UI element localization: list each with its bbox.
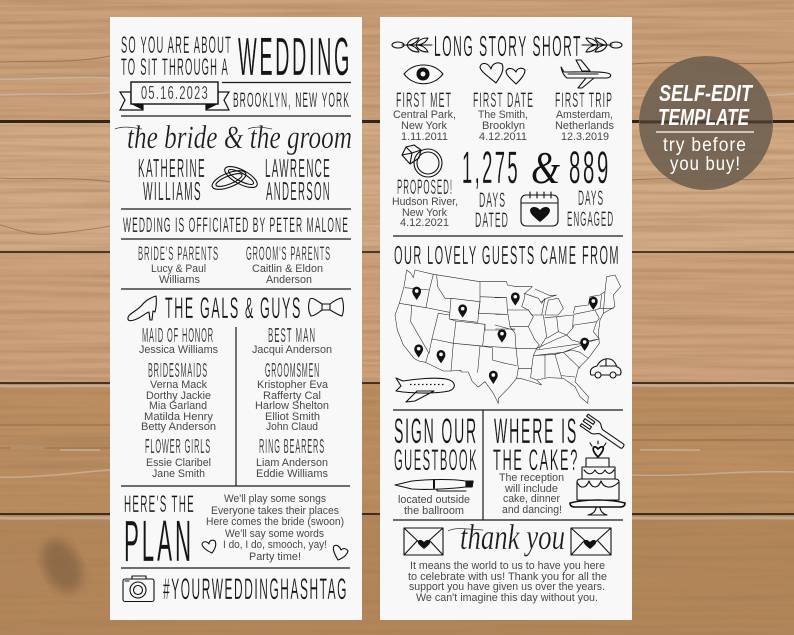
- parents block: [138, 244, 331, 286]
- first date: The Smith,: [478, 109, 528, 121]
- days dated count: DAYS: [479, 189, 506, 212]
- panel: right program card: THE CAKE?: [493, 444, 579, 477]
- parents block: Anderson: [266, 274, 312, 286]
- panel: right program card: FIRST MET: [396, 89, 452, 112]
- wedding party: groom's side: Liam Anderson: [256, 457, 328, 469]
- wedding party: groom's side: Jacqui Anderson: [252, 344, 332, 356]
- wedding party: bride's side: Dorthy Jackie: [146, 390, 211, 402]
- first date: Brooklyn: [482, 120, 525, 132]
- days engaged count: [567, 142, 614, 231]
- wedding party: bride's side: [139, 325, 218, 480]
- panel: right program card: 889: [569, 142, 611, 193]
- thank you message: support you have given us over the years.: [409, 581, 605, 593]
- script: thank you: thank you: [460, 517, 565, 557]
- parents block: Caitlin & Eldon: [252, 263, 323, 275]
- wedding party: groom's side: BEST MAN: [268, 325, 316, 347]
- days dated count: [462, 142, 520, 232]
- guestbook section: [394, 412, 478, 517]
- text: BROOKLYN, NEW YORK: [233, 89, 350, 112]
- wedding party: bride's side: Mia Garland: [149, 400, 207, 412]
- wedding party: bride's side: Jane Smith: [152, 468, 205, 480]
- panel: right program card: 1,275: [462, 142, 520, 193]
- panel: right program card: LONG STORY SHORT: [434, 31, 582, 63]
- icon: high heel shoe: [128, 296, 156, 321]
- first trip: Amsterdam,: [556, 109, 613, 121]
- panel: right program card: GUESTBOOK: [394, 444, 478, 477]
- panel: right program card: WHERE IS: [494, 412, 578, 451]
- plan schedule: We'll say some words: [225, 528, 324, 540]
- days dated count: DATED: [475, 209, 509, 232]
- text: #YOURWEDDINGHASHTAG: [163, 573, 348, 606]
- icon: wedding rings: [210, 162, 260, 193]
- thank you message: [408, 560, 607, 604]
- wedding party: bride's side: Essie Claribel: [146, 457, 211, 469]
- icon: calendar with heart: [521, 192, 558, 226]
- first met: Central Park,: [393, 109, 456, 121]
- script heading: the bride and the groom: the bride & the groom: [127, 120, 352, 156]
- icon: airplane under map: [396, 378, 454, 402]
- wedding party: bride's side: Matilda Henry: [144, 411, 214, 423]
- badge: self-edit template: [639, 56, 773, 190]
- icon: camera: [123, 576, 154, 602]
- first trip: Netherlands: [555, 120, 614, 132]
- first trip: [555, 89, 614, 143]
- badge: self-edit template: SELF-EDIT: [659, 80, 754, 106]
- parents block: Williams: [159, 274, 200, 286]
- panel: right program card: FIRST DATE: [473, 89, 534, 112]
- proposed: [392, 176, 458, 229]
- badge: self-edit template: try before: [663, 135, 747, 156]
- panel: right program card: ENGAGED: [567, 208, 614, 231]
- wedding party: bride's side: Betty Anderson: [141, 421, 216, 433]
- first trip: 12.3.2019: [561, 131, 609, 143]
- names of the couple: KATHERINE: [138, 153, 206, 183]
- ampersand: &: [531, 142, 560, 193]
- icon: eye: [404, 65, 443, 84]
- wedding party: groom's side: Elliot Smith: [265, 411, 320, 423]
- date ribbon: [120, 82, 229, 110]
- panel: left program card: ANDERSON: [266, 176, 331, 206]
- heading: so you are about to sit through a wedding: TO SIT THROUGH A: [121, 54, 229, 81]
- panel: left program card: GROOM'S PARENTS: [246, 244, 331, 265]
- panel: left program card: LAWRENCE: [265, 153, 331, 183]
- wedding party: bride's side: Jessica Williams: [139, 344, 218, 356]
- guestbook section: the ballroom: [404, 505, 464, 517]
- heading: here's the plan: [124, 491, 195, 574]
- first met: 1.11.2011: [401, 131, 448, 143]
- cake section: will include: [504, 483, 558, 495]
- thank you message: It means the world to us to have you here: [410, 560, 605, 572]
- panel: right program card: PROPOSED!: [397, 176, 453, 199]
- panel: right program card: SIGN OUR: [394, 412, 478, 451]
- panel: left program card: [110, 17, 362, 620]
- icon: left heart: [202, 540, 216, 553]
- panel: left program card: BRIDESMAIDS: [148, 360, 208, 382]
- proposed: New York: [402, 207, 447, 219]
- proposed: Hudson River,: [392, 196, 458, 208]
- icon: right envelope: [571, 528, 611, 555]
- icon: layered cake: [570, 441, 625, 515]
- script: thank you: [448, 517, 565, 557]
- panel: right program card: FIRST TRIP: [555, 89, 613, 112]
- cake section: and dancing!: [502, 504, 562, 516]
- plan schedule: Here comes the bride (swoon): [206, 516, 344, 528]
- cake section: cake, dinner: [503, 493, 560, 505]
- badge: self-edit template: you buy!: [670, 154, 741, 175]
- panel: right program card: [380, 17, 632, 620]
- wedding party: groom's side: Rafferty Cal: [263, 390, 321, 402]
- wedding party: groom's side: John Claud: [266, 421, 318, 433]
- heading: so you are about to sit through a wedding: SO YOU ARE ABOUT: [121, 32, 232, 59]
- text: WEDDING IS OFFICIATED BY PETER MALONE: [123, 214, 349, 237]
- thank you message: We can't imagine this day without you.: [416, 592, 598, 604]
- names of the couple: WILLIAMS: [143, 176, 202, 206]
- plan schedule: Party time!: [249, 551, 301, 563]
- panel: left program card: HERE'S THE: [124, 491, 195, 518]
- icon: right heart: [333, 545, 348, 560]
- first date: 4.12.2011: [479, 131, 527, 143]
- wedding party: groom's side: Eddie Williams: [256, 468, 328, 480]
- heading: so you are about to sit through a wedding: [121, 27, 352, 87]
- cake section: The reception: [499, 472, 564, 484]
- map pins: [412, 287, 598, 384]
- panel: left program card: FLOWER GIRLS: [145, 436, 211, 458]
- icon: bow tie: [309, 298, 344, 316]
- panel: left program card: MAID OF HONOR: [142, 325, 214, 347]
- plan schedule: [206, 493, 344, 563]
- badge: self-edit template: TEMPLATE: [658, 104, 749, 130]
- icon: right laurel: [582, 38, 622, 52]
- icon: airplane: [561, 60, 611, 88]
- icon: fork: [580, 414, 627, 453]
- panel: left program card: GROOMSMEN: [265, 360, 320, 382]
- guestbook section: located outside: [398, 494, 470, 506]
- plan schedule: We'll play some songs: [224, 493, 326, 505]
- parents block: Lucy & Paul: [151, 263, 206, 275]
- panel: left program card: PLAN: [124, 509, 194, 574]
- wedding party: groom's side: [252, 325, 332, 480]
- icon: left envelope: [404, 528, 443, 555]
- panel: left program card: RING BEARERS: [259, 436, 325, 458]
- cake section: [493, 412, 579, 516]
- proposed: 4.12.2021: [400, 217, 449, 229]
- first met: [393, 89, 456, 143]
- parents block: BRIDE'S PARENTS: [138, 244, 219, 265]
- wedding party: bride's side: Verna Mack: [150, 379, 207, 391]
- date ribbon: 05.16.2023: [141, 83, 209, 103]
- panel: left program card: THE GALS & GUYS: [165, 292, 302, 325]
- icon: left laurel: [392, 38, 432, 52]
- thank you message: to celebrate with us! Thank you for all the: [408, 571, 607, 583]
- map of the united states with pins: [395, 270, 621, 403]
- icon: engagement ring: [402, 145, 442, 177]
- names of the couple: [138, 153, 331, 206]
- icon: pen: [395, 480, 473, 491]
- text: WEDDING: [238, 27, 352, 87]
- first date: [473, 89, 534, 143]
- wedding party: groom's side: Harlow Shelton: [255, 400, 329, 412]
- plan schedule: Everyone takes their places: [211, 505, 339, 517]
- plan schedule: I do, I do, smooch, yay!: [223, 539, 327, 551]
- days engaged count: DAYS: [578, 187, 604, 210]
- icon: car: [590, 359, 621, 378]
- wedding party: groom's side: Kristopher Eva: [257, 379, 329, 391]
- first met: New York: [401, 120, 447, 132]
- icon: two hearts: [480, 63, 525, 84]
